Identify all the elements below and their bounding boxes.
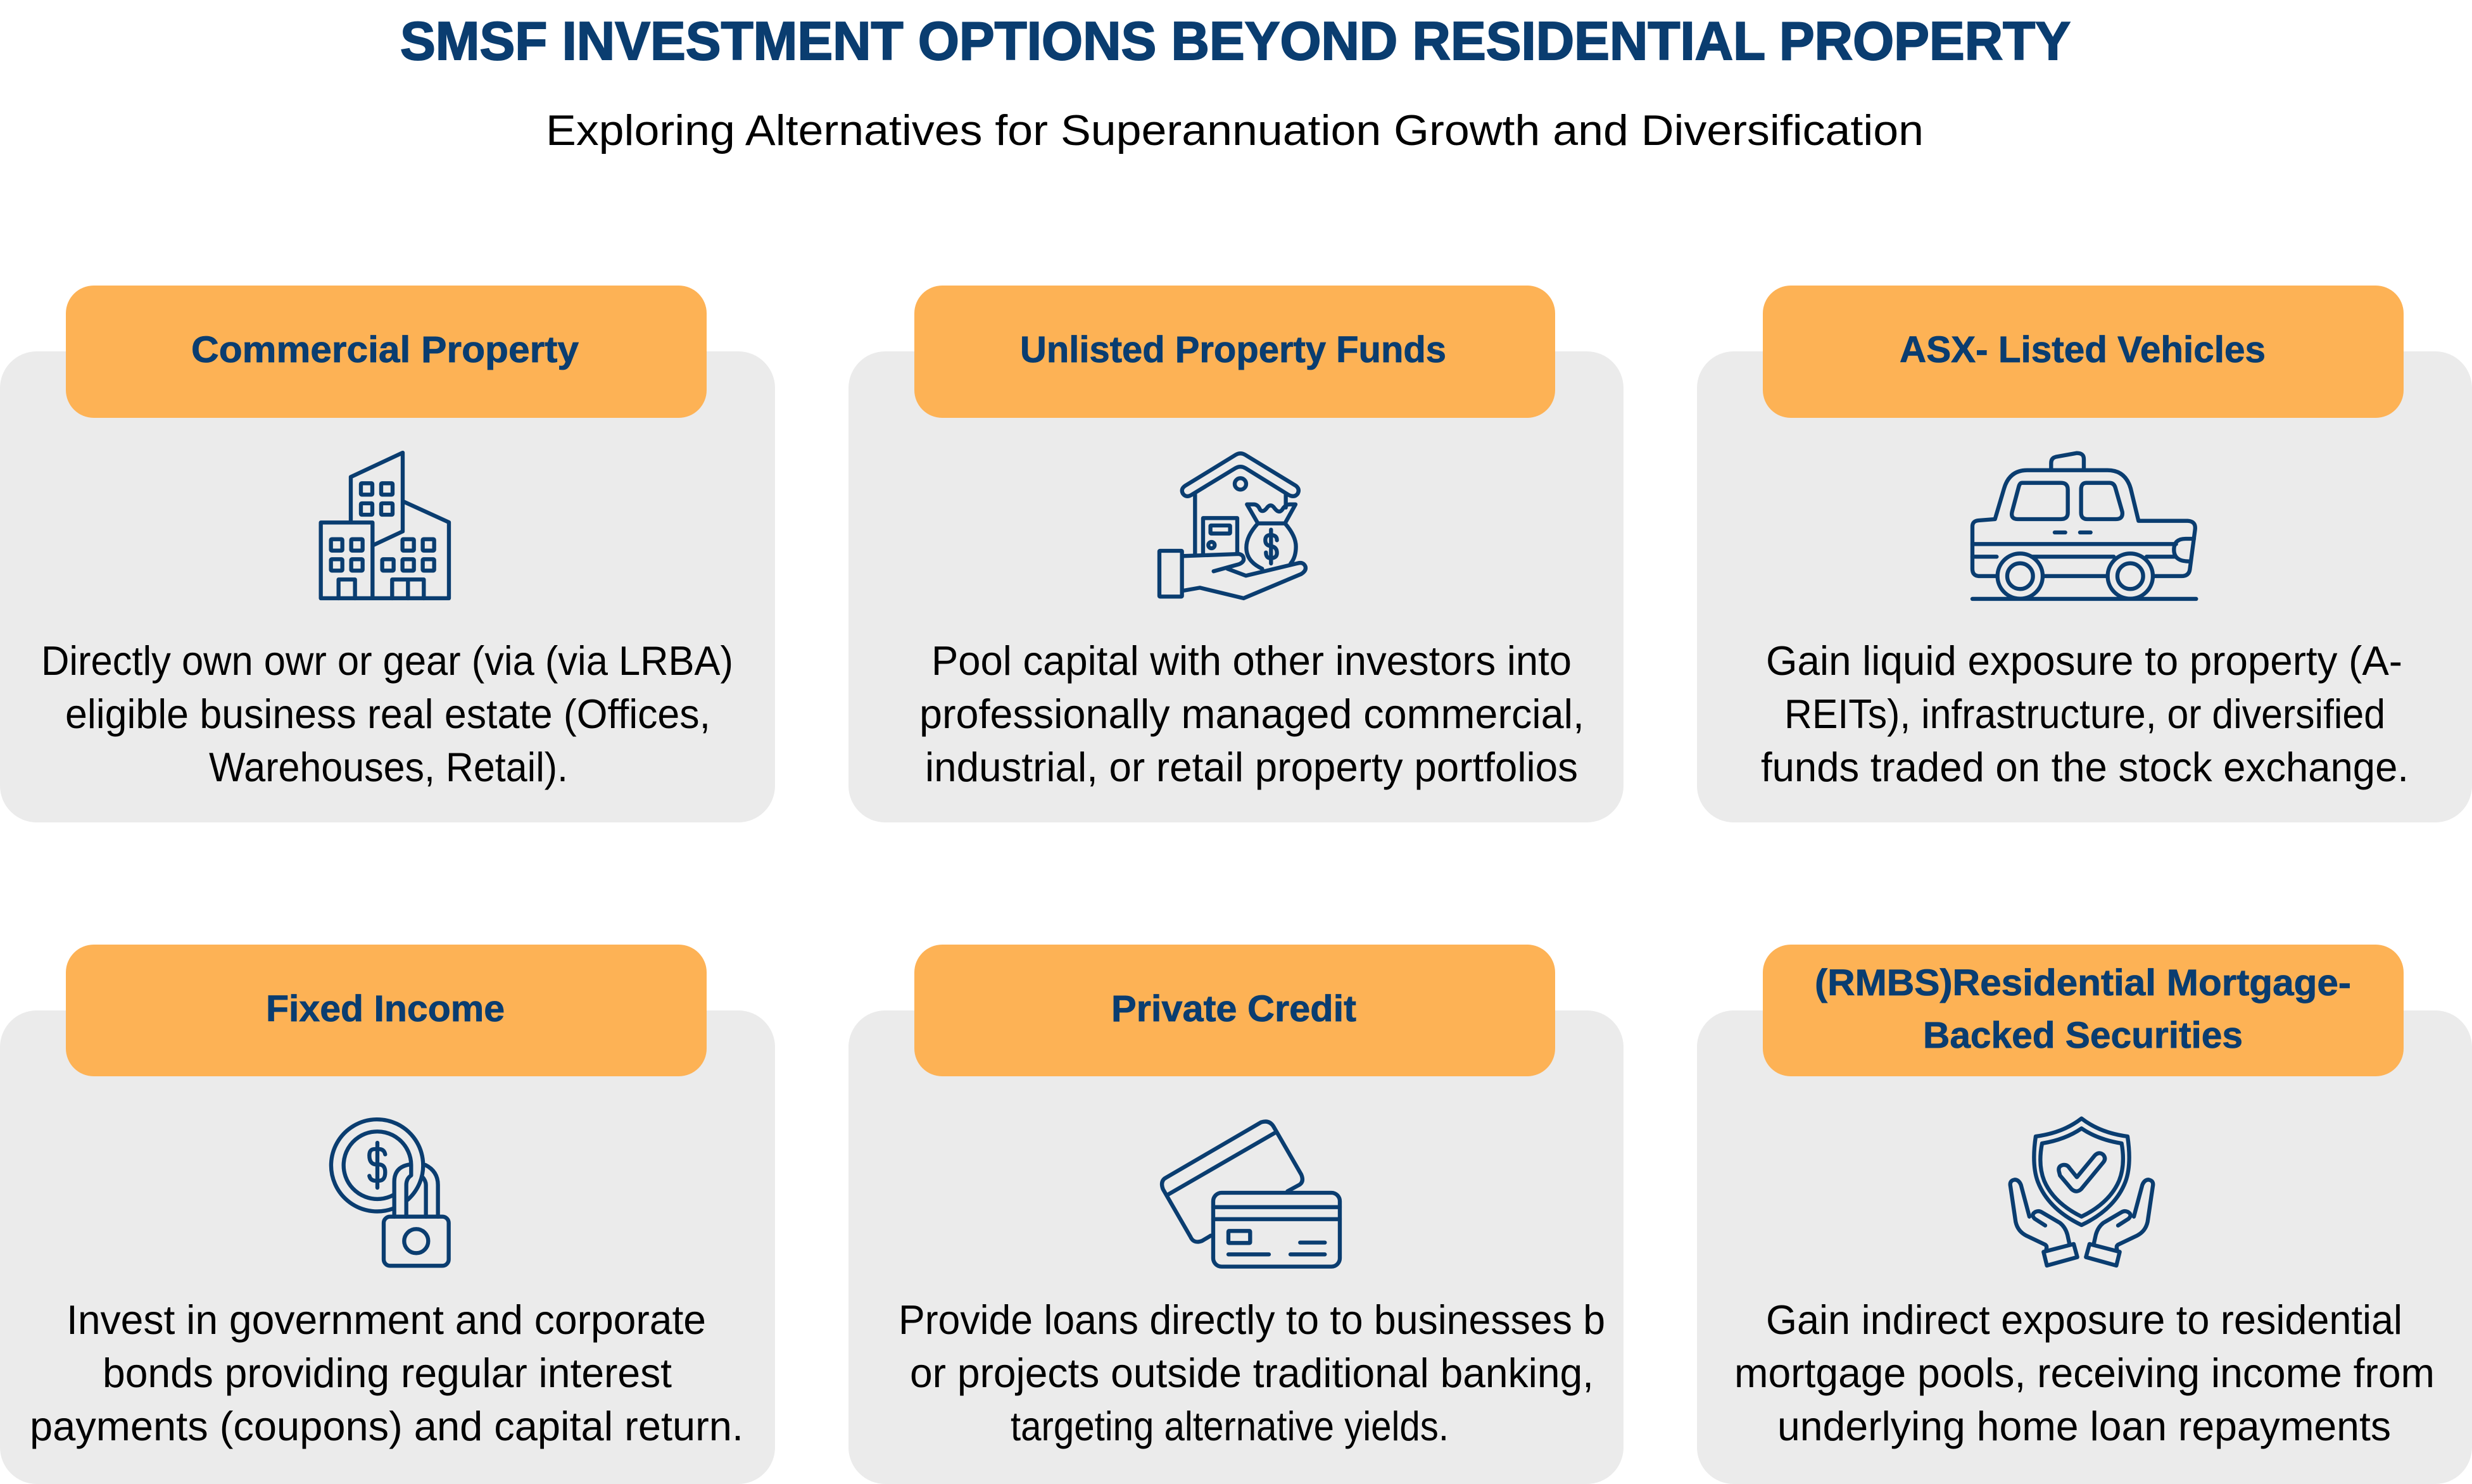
description: residential mortgage backed securities: mortgage pools, receiving income from [1734, 1350, 2435, 1396]
heading: commercial property: Commercial Property [191, 329, 579, 370]
heading: private credit: Private Credit [1111, 988, 1356, 1029]
description: asx listed vehicles: REITs), infrastructure, or diversified [1784, 691, 2385, 737]
panel: asx listed vehicles [1697, 286, 2472, 822]
icon: shield in hands [2010, 1119, 2153, 1266]
heading: unlisted property funds: Unlisted Property Funds [1020, 329, 1446, 370]
title: SMSF INVESTMENT OPTIONS BEYOND RESIDENTIAL PROPERTY [400, 11, 2071, 72]
description: commercial property: Directly own owr or gear (via (via LRBA) [41, 638, 733, 684]
description: asx listed vehicles: funds traded on the stock exchange. [1761, 744, 2409, 790]
description: unlisted property funds: Pool capital with other investors into [931, 638, 1572, 684]
description: fixed income [30, 1297, 743, 1449]
panel: unlisted property funds [848, 286, 1624, 822]
description: unlisted property funds: professionally managed commercial, [919, 691, 1584, 737]
description: fixed income: bonds providing regular interest [103, 1350, 672, 1396]
description: unlisted property funds: industrial, or retail property portfolios [925, 744, 1578, 790]
subtitle: Exploring Alternatives for Superannuation Growth and Diversification [546, 106, 1924, 154]
heading: asx listed vehicles: ASX- Listed Vehicles [1900, 329, 2266, 370]
icon: office buildings [321, 453, 449, 598]
heading: residential mortgage backed securities [1763, 945, 2404, 1076]
description: commercial property: Warehouses, Retail). [209, 744, 568, 790]
panel: fixed income [0, 945, 775, 1484]
icon: coin and padlock [331, 1119, 449, 1266]
description: private credit: Provide loans directly to to businesses b [899, 1297, 1605, 1343]
description: private credit [899, 1297, 1605, 1449]
description: residential mortgage backed securities: Gain indirect exposure to residential [1766, 1297, 2402, 1343]
icon: credit cards [1162, 1121, 1340, 1267]
description: private credit: or projects outside traditional banking, [910, 1350, 1594, 1396]
description: commercial property [41, 638, 733, 790]
description: fixed income: payments (coupons) and capital return. [30, 1403, 743, 1449]
heading: unlisted property funds [914, 286, 1555, 418]
panel: residential mortgage backed securities [1697, 945, 2472, 1484]
heading: asx listed vehicles [1763, 286, 2404, 418]
description: unlisted property funds [919, 638, 1584, 790]
description: asx listed vehicles [1761, 638, 2409, 790]
heading: residential mortgage backed securities: Backed Securities [1923, 1015, 2243, 1056]
description: residential mortgage backed securities [1734, 1297, 2435, 1449]
icon: house and money bag in hand [1159, 453, 1306, 598]
heading: fixed income: Fixed Income [266, 988, 505, 1029]
description: asx listed vehicles: Gain liquid exposure to property (A- [1766, 638, 2402, 684]
description: fixed income: Invest in government and corporate [66, 1297, 706, 1343]
panel: private credit [848, 945, 1624, 1484]
description: commercial property: eligible business real estate (Offices, [65, 691, 710, 737]
heading: residential mortgage backed securities: (RMBS)Residential Mortgage- [1815, 962, 2351, 1003]
heading: commercial property [66, 286, 707, 418]
heading: fixed income [66, 945, 707, 1076]
description: private credit: targeting alternative yields. [1011, 1403, 1449, 1449]
description: residential mortgage backed securities: underlying home loan repayments [1777, 1403, 2391, 1449]
panel: commercial property [0, 286, 775, 822]
heading: private credit [914, 945, 1555, 1076]
icon: taxi car [1972, 453, 2196, 599]
